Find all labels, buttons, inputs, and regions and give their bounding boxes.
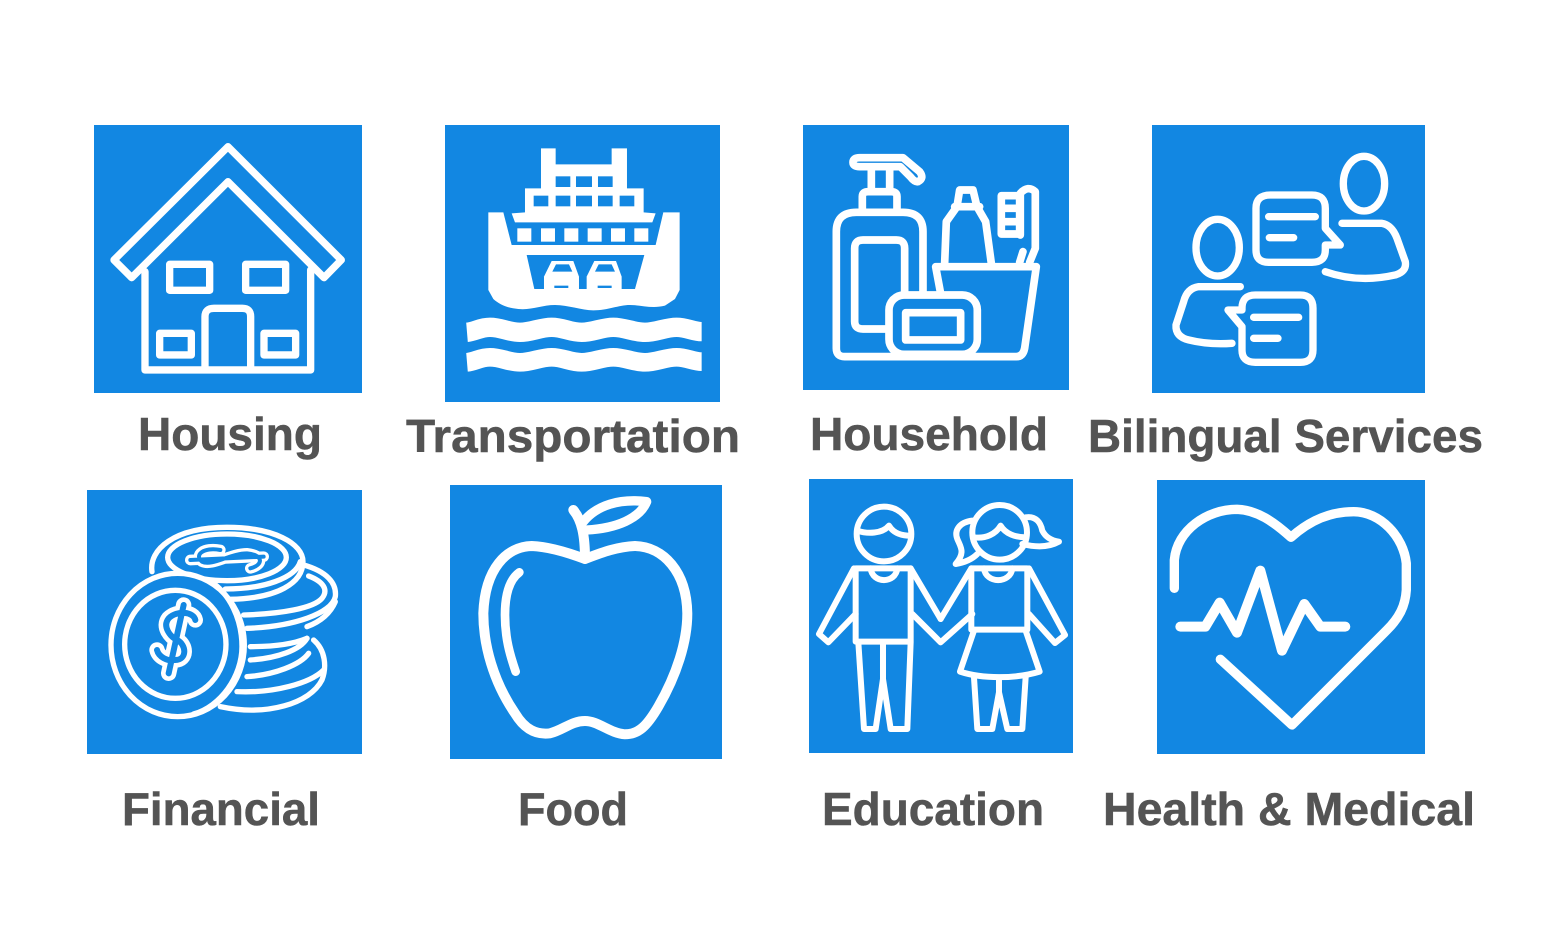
- icon: household products: [836, 158, 1036, 357]
- heading: food: Food: [518, 783, 628, 835]
- icon: children holding hands: [819, 505, 1065, 729]
- icon: apple: [483, 501, 687, 734]
- icon: coins: [111, 527, 335, 717]
- heading: education: Education: [822, 783, 1044, 835]
- icon: two people talking: [1176, 156, 1406, 362]
- heading: transportation: Transportation: [406, 410, 740, 462]
- heading: health and medical: Health & Medical: [1103, 783, 1475, 835]
- heading: bilingual services: Bilingual Services: [1088, 410, 1483, 462]
- heading: household: Household: [810, 408, 1048, 460]
- icon: ferry: [467, 148, 702, 362]
- panel: food: [450, 485, 722, 759]
- panel: household: [803, 125, 1069, 390]
- panel: education: [809, 479, 1073, 753]
- panel: bilingual services: [1152, 125, 1425, 393]
- icon: heart with pulse: [1174, 509, 1406, 725]
- heading: housing: Housing: [138, 408, 322, 460]
- panel: health and medical: [1157, 480, 1425, 754]
- panel: housing: [94, 125, 362, 393]
- panel: financial: [87, 490, 362, 754]
- icon: house: [114, 147, 341, 370]
- heading: financial: Financial: [122, 783, 320, 835]
- panel: transportation: [445, 125, 720, 402]
